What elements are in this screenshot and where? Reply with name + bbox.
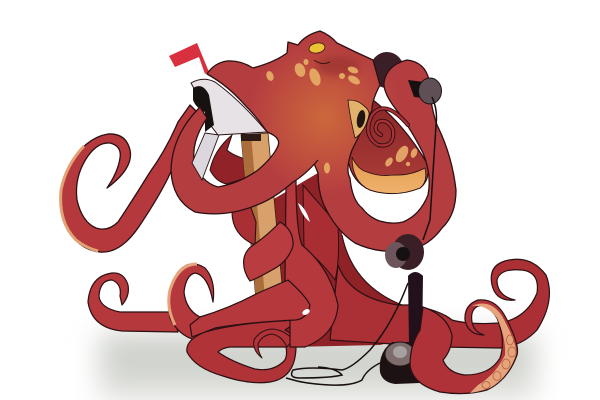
mailbox flag	[169, 43, 209, 74]
mantle	[348, 100, 428, 194]
handset earpiece and stem	[408, 78, 442, 104]
lower band tentacle	[190, 280, 311, 337]
curled tentacle with suckers	[169, 264, 260, 340]
ground shadow	[100, 334, 535, 400]
tentacle twisted around the post	[232, 205, 293, 281]
spiral tentacle tip	[368, 108, 408, 145]
telephone mouthpiece	[385, 234, 424, 270]
far-left low tentacle	[88, 273, 178, 332]
head with right phone-holding arm	[253, 31, 456, 251]
funnel with dark opening	[348, 100, 369, 138]
front central leg	[285, 178, 338, 347]
orange underside of mantle	[352, 157, 426, 194]
shading around the eye	[316, 56, 360, 76]
dark central leg mass	[272, 160, 420, 347]
red inner leg band	[303, 185, 339, 280]
mailbox door	[192, 133, 219, 180]
wooden mailbox post	[241, 133, 283, 300]
left arm looping around the mailbox	[171, 61, 318, 214]
telephone stand	[408, 272, 423, 345]
eye	[308, 42, 330, 64]
bottom loop tentacle	[187, 320, 300, 383]
mantle spots	[384, 144, 419, 168]
back tentacle inside the loop	[210, 135, 248, 184]
telephone cord	[286, 97, 436, 385]
telephone earpiece sphere held behind arm	[370, 52, 404, 88]
upper-left curled tentacle	[60, 105, 200, 252]
right tentacle with curl	[330, 259, 549, 348]
mailbox	[191, 79, 267, 135]
head spots	[265, 59, 361, 174]
dark stripe edge of right leg	[342, 235, 402, 305]
front-right tentacle with suckers	[410, 300, 518, 394]
gap in the legs	[298, 203, 310, 222]
telephone base with dial	[380, 342, 420, 384]
